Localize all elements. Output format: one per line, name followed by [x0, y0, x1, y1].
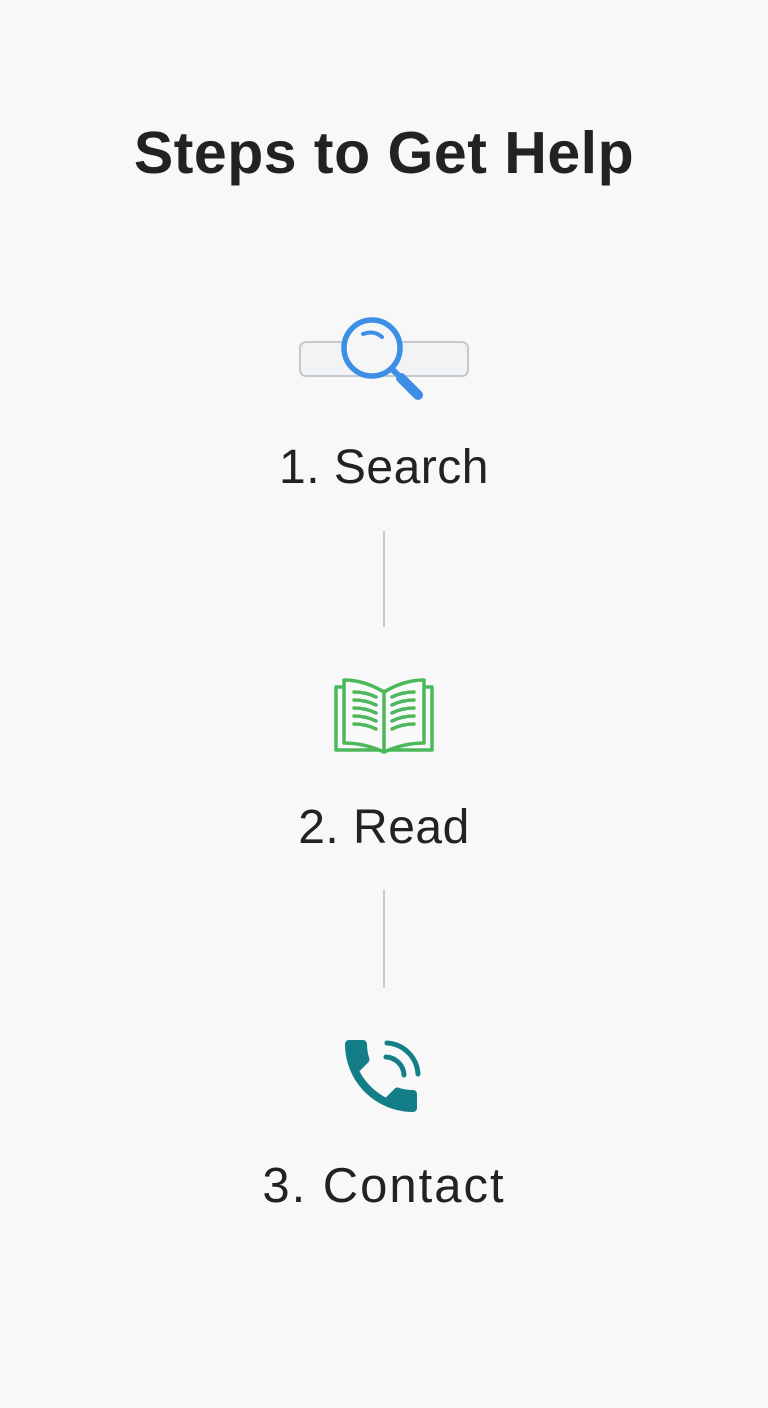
icon: open book — [336, 680, 432, 752]
icon: search bar with magnifier — [300, 320, 468, 395]
icon: phone — [345, 1040, 418, 1112]
title: Steps to Get Help — [134, 120, 634, 186]
step 3 label: 3. Contact — [262, 1159, 506, 1213]
step 1 label: 1. Search — [279, 441, 489, 494]
connector line 1 — [383, 531, 385, 627]
step 2 label: 2. Read — [298, 801, 470, 854]
connector line 2 — [383, 890, 385, 988]
